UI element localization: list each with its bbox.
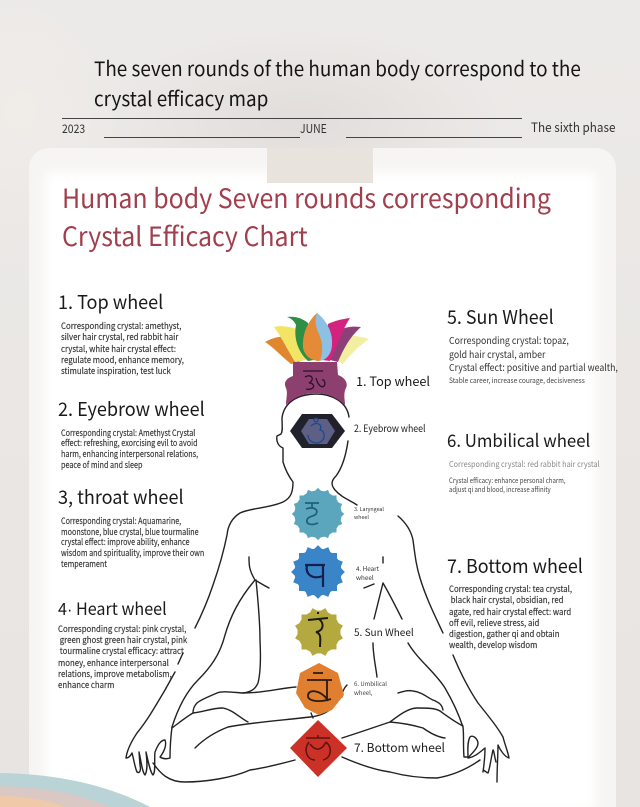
1 top wheel text: 1. Top wheel [58, 288, 163, 315]
white card [29, 148, 616, 807]
icon: sun chakra [295, 608, 343, 656]
main title: The seven rounds of the human body correspond to the [94, 53, 581, 82]
date bar: 2023 [62, 120, 85, 137]
chart heading: Human body Seven rounds corresponding [62, 177, 551, 216]
figure labels: 1. Top wheel [356, 371, 430, 390]
icon: sacral chakra [296, 663, 344, 715]
1 top wheel text: silver hair crystal, red rabbit hair [61, 331, 178, 343]
3 throat wheel text: moonstone, blue crystal, blue tourmaline [61, 526, 199, 538]
5 sun wheel text: Crystal effect: positive and partial wealth, [449, 360, 618, 374]
4 heart wheel text: money, enhance interpersonal [58, 657, 169, 669]
4 heart wheel text [58, 595, 188, 691]
chart heading [62, 177, 551, 254]
5 sun wheel text: Corresponding crystal: topaz, [449, 333, 569, 347]
3 throat wheel text [58, 483, 204, 570]
7 bottom wheel text: off evil, relieve stress, aid [449, 617, 539, 629]
1 top wheel text: regulate mood, enhance memory, [61, 354, 184, 366]
3 throat wheel text: wisdom and spirituality, improve their own [61, 547, 204, 559]
6 umbilical wheel text [447, 427, 600, 495]
4 heart wheel text: green ghost green hair crystal, pink [60, 634, 187, 646]
4 heart wheel text: tourmaline crystal efficacy: attract [60, 645, 184, 657]
icon: throat chakra [292, 488, 344, 540]
main title: crystal efficacy map [94, 82, 268, 112]
5 sun wheel text [447, 303, 618, 386]
7 bottom wheel text [447, 552, 583, 651]
text: 2. Eyebrow wheel [354, 420, 426, 435]
2 eyebrow wheel text: 2. Eyebrow wheel [58, 395, 205, 422]
chart heading: Crystal Efficacy Chart [62, 215, 308, 254]
4 heart wheel text: Corresponding crystal: pink crystal, [58, 623, 186, 635]
1 top wheel text: Corresponding crystal: amethyst, [61, 320, 181, 332]
7 bottom wheel text: black hair crystal, obsidian, red [451, 594, 563, 606]
3 throat wheel text: temperament [61, 558, 107, 570]
7 bottom wheel text: 7. Bottom wheel [447, 552, 583, 579]
text: 3. Laryngeal [354, 505, 384, 513]
7 bottom wheel text: Corresponding crystal: tea crystal, [449, 583, 572, 595]
6 umbilical wheel text: 6. Umbilical wheel [447, 427, 590, 453]
5 sun wheel text: gold hair crystal, amber [449, 346, 545, 360]
7 bottom wheel text: digestion, gather qi and obtain [449, 628, 559, 640]
6 umbilical wheel text: Corresponding crystal: red rabbit hair crystal [449, 458, 600, 470]
text: wheel, [354, 688, 372, 696]
1 top wheel text [58, 288, 184, 377]
text: wheel [356, 572, 374, 582]
6 umbilical wheel text: adjust qi and blood, increase affinity [449, 485, 551, 495]
2 eyebrow wheel text: peace of mind and sleep [61, 459, 143, 471]
text: 4. Heart [356, 564, 379, 572]
icon: root chakra [291, 721, 346, 776]
5 sun wheel text: Stable career, increase courage, decisiveness [449, 376, 585, 386]
1 top wheel text: crystal, white hair crystal effect: [61, 343, 176, 355]
2 eyebrow wheel text: effect: refreshing, exorcising evil to avoid [61, 437, 198, 449]
icon: crown lotus [265, 313, 369, 364]
icon: third eye chakra [290, 414, 345, 448]
7 bottom wheel text: agate, red hair crystal effect: ward [449, 606, 571, 618]
2 eyebrow wheel text: Corresponding crystal: Amethyst Crystal [61, 426, 195, 438]
2 eyebrow wheel text [58, 395, 205, 471]
date bar [62, 117, 615, 138]
body outline [126, 394, 509, 782]
5 sun wheel text: 5. Sun Wheel [447, 303, 554, 330]
icon: crown chakra [285, 362, 347, 405]
text: 6. Umbilical [354, 678, 387, 688]
text: 5. Sun Wheel [354, 624, 414, 639]
4 heart wheel text: 4· Heart wheel [58, 595, 167, 620]
main title [94, 53, 581, 112]
text: 7. Bottom wheel [354, 739, 445, 756]
3 throat wheel text: Corresponding crystal: Aquamarine, [61, 515, 181, 527]
date bar: The sixth phase [531, 117, 615, 136]
3 throat wheel text: 3, throat wheel [58, 483, 184, 510]
4 heart wheel text: relations, improve metabolism, [58, 668, 172, 680]
icon: heart chakra [291, 545, 345, 599]
7 bottom wheel text: wealth, develop wisdom [449, 639, 537, 651]
1 top wheel text: stimulate inspiration, test luck [61, 365, 171, 377]
2 eyebrow wheel text: harm, enhancing interpersonal relations, [61, 448, 198, 460]
text: wheel [354, 513, 369, 521]
date bar: JUNE [300, 120, 327, 137]
tape on the card [267, 148, 373, 183]
4 heart wheel text: enhance charm [58, 679, 114, 691]
6 umbilical wheel text: Crystal efficacy: enhance personal charm, [449, 476, 565, 486]
3 throat wheel text: crystal effect: improve ability, enhance [61, 536, 190, 548]
